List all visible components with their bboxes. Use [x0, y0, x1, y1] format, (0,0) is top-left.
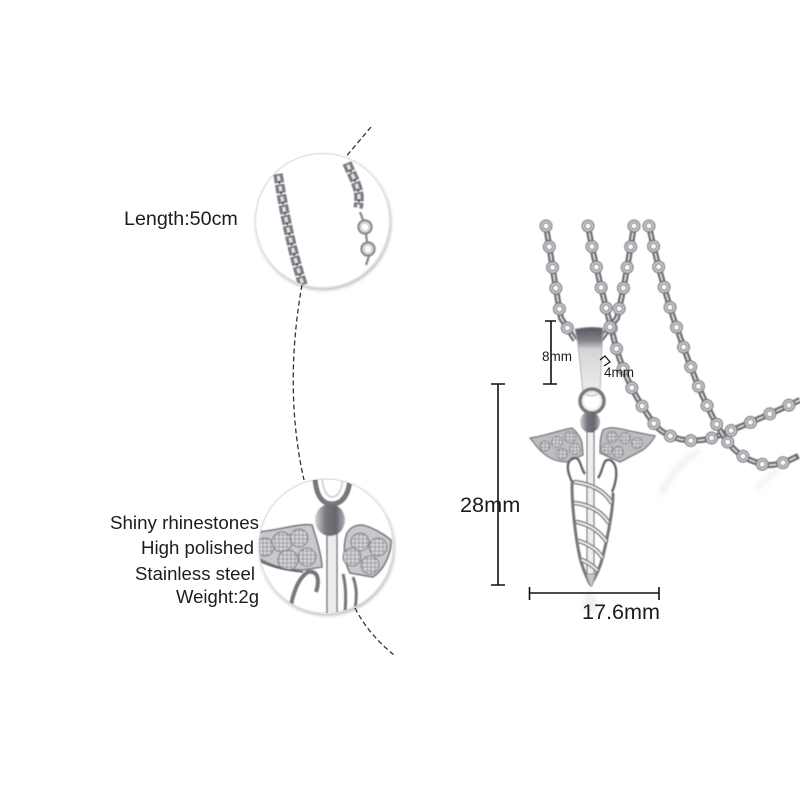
left wing [530, 428, 583, 462]
chain 1 [546, 226, 575, 340]
dimension: 28mm [460, 384, 520, 585]
ball [580, 412, 600, 432]
detail circle: chain length [256, 154, 390, 288]
dimension: 28mm: 28mm [460, 492, 520, 517]
loop ring [315, 478, 350, 504]
dashed connector: bottom [355, 608, 394, 655]
bail [575, 327, 603, 396]
necklace chains [546, 226, 800, 495]
pendant: caduceus [530, 327, 655, 612]
dimension: 8mm [542, 321, 572, 384]
left chain segment [278, 174, 303, 285]
right wing [600, 428, 655, 462]
detail circle: pendant wings close-up [256, 478, 393, 615]
chain 3 [600, 226, 634, 340]
dimension: 17.6mm: 17.6mm [582, 599, 660, 624]
dimension: 17.6mm [530, 587, 660, 624]
dimension: 4mm [600, 356, 634, 380]
label: shiny rhinestones: Shiny rhinestones [110, 512, 259, 533]
left wing rhinestones [540, 431, 580, 460]
snake curves [290, 572, 318, 612]
label: stainless steel: Stainless steel [135, 563, 255, 584]
left wing [258, 525, 322, 570]
rod [327, 530, 337, 615]
label: length: Length:50cm [124, 208, 238, 230]
dashed connector: middle curve [293, 285, 304, 480]
labels: features [110, 512, 259, 607]
tip reflection [583, 590, 597, 612]
snake body [572, 482, 613, 584]
chain 4 [649, 226, 800, 465]
jump ring [580, 389, 604, 413]
dashed connector: top [344, 127, 371, 159]
soft reflections [660, 450, 778, 495]
right chain segment [347, 163, 374, 265]
dimension: 4mm: 4mm [604, 365, 634, 380]
chain 2 [588, 226, 800, 441]
right wing rhinestones [602, 432, 642, 458]
snake heads [568, 458, 616, 492]
rod [587, 432, 594, 580]
tip [586, 574, 596, 586]
dimension: 8mm: 8mm [542, 349, 572, 364]
right wing [344, 525, 391, 577]
label: high polished: High polished [141, 537, 254, 558]
label: weight: Weight:2g [176, 586, 259, 607]
ball [315, 504, 345, 536]
